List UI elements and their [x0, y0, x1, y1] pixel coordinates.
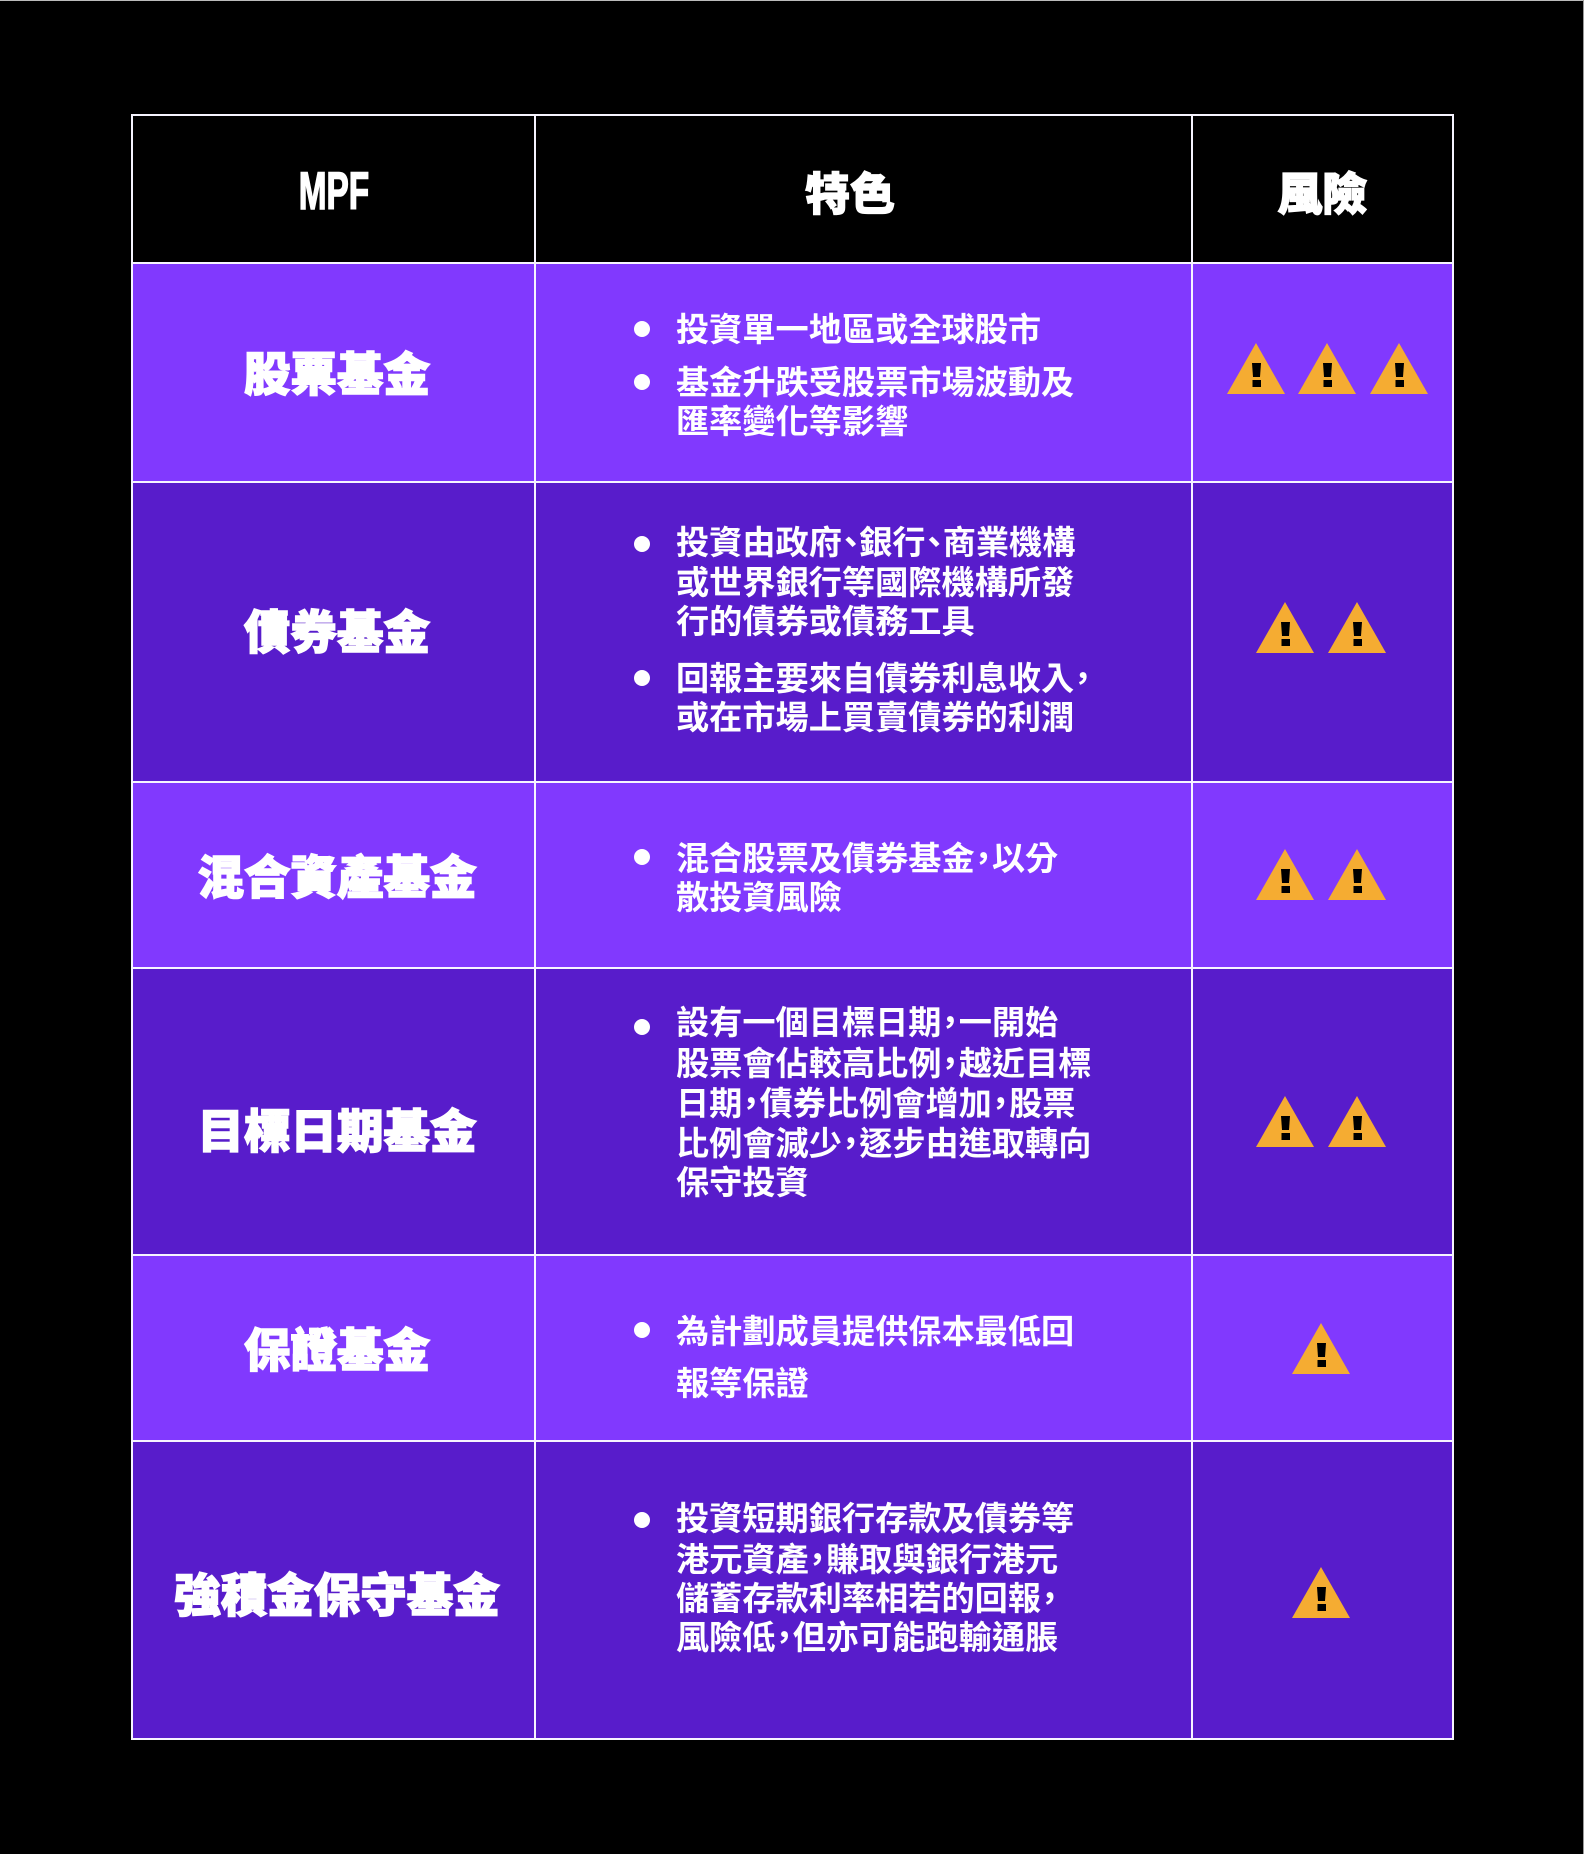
- bullet: [634, 1512, 650, 1528]
- fund name: guaranteed fund: 保證基金: [244, 1314, 430, 1381]
- fund name: equity fund: 股票基金: [244, 338, 430, 405]
- icon: warning triangle: [1227, 343, 1285, 394]
- icon: warning triangle: [1328, 1096, 1386, 1147]
- header cell: features: [534, 114, 1193, 264]
- bullet: [634, 536, 650, 552]
- icon: warning triangle: [1370, 343, 1428, 394]
- icon: warning triangle: [1328, 849, 1386, 900]
- feature text continued: 保守投資: [676, 1155, 809, 1204]
- bullet: [634, 670, 650, 686]
- row 1 risk cell: three warnings: [1191, 262, 1454, 483]
- header cell: MPF: [131, 114, 536, 264]
- row 2 name cell: [131, 481, 536, 783]
- feature text continued: 或世界銀行等國際機構所發: [676, 555, 1074, 604]
- heading: risk: 風險: [1277, 158, 1368, 223]
- icon: warning triangle: [1292, 1323, 1350, 1374]
- icon: warning triangle: [1256, 602, 1314, 653]
- feature text continued: 匯率變化等影響: [676, 394, 908, 443]
- feature text continued: 風險低，但亦可能跑輸通脹: [676, 1610, 1058, 1659]
- feature text continued: 港元資產，賺取與銀行港元: [676, 1532, 1058, 1581]
- row 4 name cell: [131, 967, 536, 1256]
- row 6 risk cell: one warning: [1191, 1440, 1454, 1740]
- feature text continued: 報等保證: [676, 1356, 809, 1405]
- header cell: risk: [1191, 114, 1454, 264]
- row 6 features cell: [534, 1440, 1193, 1740]
- feature text continued: 行的債券或債務工具: [676, 594, 975, 643]
- row 2 risk cell: two warnings: [1191, 481, 1454, 783]
- feature text: 回報主要來自債券利息收入，: [676, 651, 1099, 700]
- feature text: 投資短期銀行存款及債券等: [676, 1491, 1074, 1540]
- row 4 risk cell: two warnings: [1191, 967, 1454, 1256]
- icon: warning triangle: [1292, 1567, 1350, 1618]
- feature text continued: 股票會佔較高比例，越近目標: [676, 1036, 1091, 1085]
- feature text: 混合股票及債券基金，以分: [676, 830, 1058, 880]
- bullet: [634, 849, 650, 865]
- feature text continued: 日期，債券比例會增加，股票: [676, 1076, 1075, 1125]
- fund name: mixed assets fund: 混合資產基金: [198, 841, 476, 908]
- icon: warning triangle: [1256, 849, 1314, 900]
- fund name: MPF conservative fund: 強積金保守基金: [174, 1559, 500, 1626]
- bullet: [634, 1322, 650, 1338]
- row 3 risk cell: two warnings: [1191, 781, 1454, 969]
- feature text: 設有一個目標日期，一開始: [676, 995, 1058, 1044]
- icon: warning triangle: [1328, 602, 1386, 653]
- bullet: [634, 321, 650, 337]
- fund name: target date fund: 目標日期基金: [198, 1095, 476, 1162]
- bullet: [634, 374, 650, 390]
- feature text: 投資單一地區或全球股市: [676, 302, 1041, 351]
- feature text continued: 比例會減少，逐步由進取轉向: [676, 1116, 1091, 1165]
- feature text: 為計劃成員提供保本最低回: [676, 1304, 1074, 1352]
- row 5 name cell: [131, 1254, 536, 1442]
- row 5 features cell: [534, 1254, 1193, 1442]
- row 6 name cell: [131, 1440, 536, 1740]
- fund name: bond fund: 債券基金: [244, 596, 430, 663]
- icon: warning triangle: [1298, 343, 1356, 394]
- bullet: [634, 1019, 650, 1035]
- row 1 name cell: [131, 262, 536, 483]
- feature text continued: 或在市場上買賣債券的利潤: [676, 690, 1074, 739]
- feature text continued: 儲蓄存款利率相若的回報，: [676, 1571, 1066, 1620]
- row 5 risk cell: one warning: [1191, 1254, 1454, 1442]
- row 2 features cell: [534, 481, 1193, 783]
- row 4 features cell: [534, 967, 1193, 1256]
- heading: MPF: MPF: [298, 162, 369, 221]
- feature text: 基金升跌受股票市場波動及: [676, 355, 1074, 404]
- row 1 features cell: [534, 262, 1193, 483]
- heading: features: 特色: [805, 158, 895, 223]
- row 3 name cell: [131, 781, 536, 969]
- row 3 features cell: [534, 781, 1193, 969]
- icon: warning triangle: [1256, 1096, 1314, 1147]
- feature text continued: 散投資風險: [676, 870, 842, 918]
- feature text: 投資由政府、銀行、商業機構: [676, 515, 1075, 564]
